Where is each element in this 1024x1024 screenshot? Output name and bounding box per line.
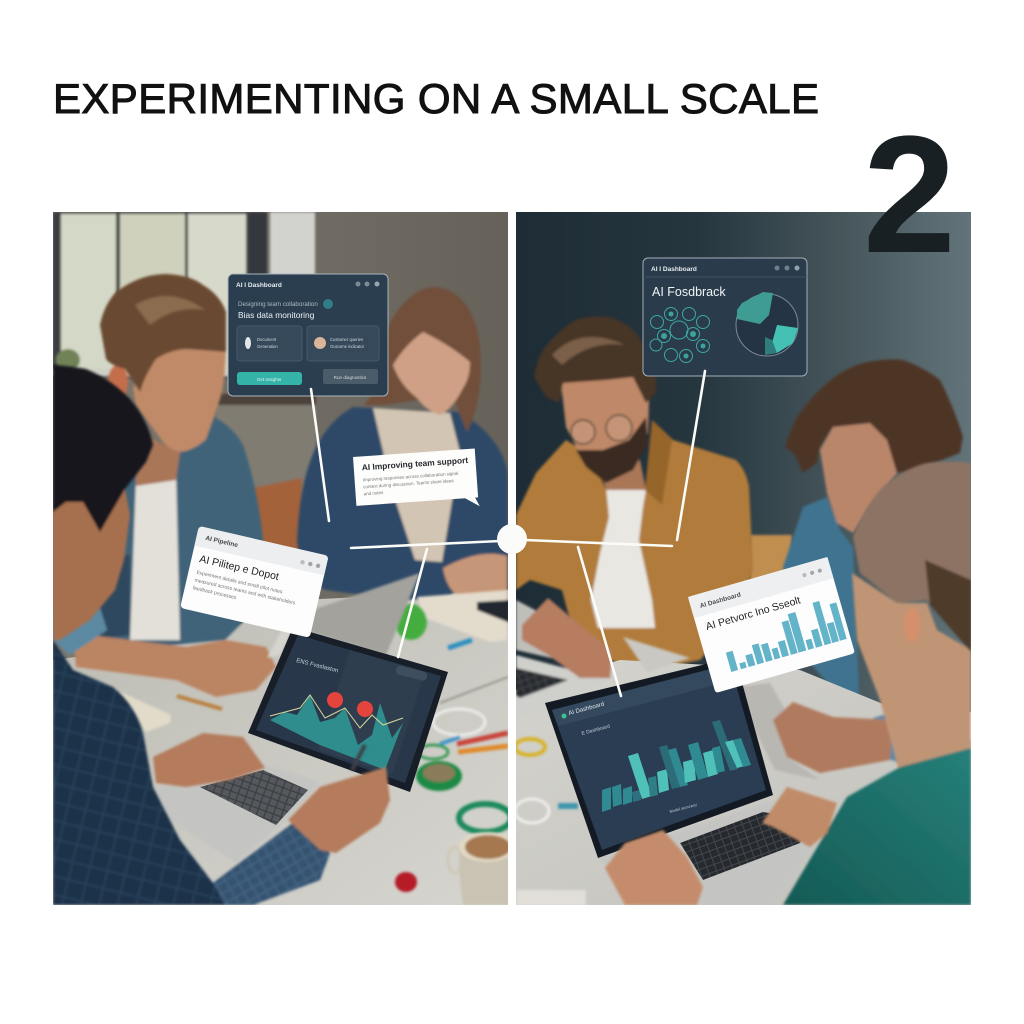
person: man in denim shirt [53,274,276,697]
network diagram [650,308,710,362]
laptop with bar chart: AI Dashboard [568,702,605,717]
laptop back lid [267,573,420,658]
callout: team feedback: and notes [363,490,384,496]
laptop with line chart: ENS Fvaslaston [296,658,339,674]
bar chart [602,720,751,812]
card: AI feedback [643,258,807,376]
small items on table [83,590,511,892]
laptop with bar chart [545,664,801,880]
laptop with line chart [200,632,448,860]
callout: team feedback: AI Improving team support [361,455,469,472]
panel: right photo [515,212,971,906]
card: pilot output [180,526,329,638]
laptop with bar chart: E Dashboard [581,724,611,737]
card: dark dashboard: Customer queries [330,337,363,342]
person: curly haired student [783,359,963,720]
table items [515,739,586,906]
chair [750,535,792,585]
connector lines [311,371,705,696]
person: foreground man in plaid [53,365,390,905]
window [53,212,316,495]
card: pilot output: AI Pipeline [205,535,239,549]
callout: team feedback: Improving responses across collaboration signal [362,471,459,482]
card: AI prediction result [688,557,855,693]
back lid and hand [622,636,898,779]
coffee mug [448,832,515,905]
title: EXPERIMENTING ON A SMALL SCALE [53,75,819,122]
card: dark dashboard: Run diagnostics [334,375,367,380]
laptop with bar chart: Model accuracy [669,802,697,814]
card: pilot output: feedback processes [192,585,237,601]
table [516,660,971,905]
card: pilot output: Experiment details and small pilot notes [196,570,283,595]
panel: left photo [53,212,515,905]
card: dark dashboard: Designing team collaboration [238,301,318,308]
person: foreground woman [605,462,971,905]
callout: team feedback: context during discussion. Teams share ideas [363,478,455,489]
card: pilot output: AI Pilitep e Dopot [198,553,280,583]
card: dark dashboard [228,274,388,396]
wall [53,212,508,660]
card: dark dashboard: Outcome indicator [330,344,365,349]
callout: team feedback [353,448,480,506]
card: AI feedback: AI I Dashboard [651,266,697,273]
person: man in mustard jacket [516,316,753,672]
card: dark dashboard: Document [257,337,277,342]
card: pilot output: measured across teams and with stakeholders [194,577,296,607]
card: dark dashboard: Bias data monitoring [238,310,315,320]
card: AI prediction result: AI Dashboard [699,592,742,610]
chart area [270,695,403,770]
card: dark dashboard: Get Insights [257,377,282,382]
card: dark dashboard: AI I Dashboard [236,282,282,289]
chair [253,478,302,550]
person: woman with laptop [297,287,508,603]
centre node [497,524,527,554]
card: AI prediction result: AI Petvorc Ino Sseolt [704,594,802,633]
wall [516,212,971,712]
big number: 2 [863,102,956,288]
card: dark dashboard: Generation [257,344,278,349]
table [53,590,508,905]
card: AI feedback: AI Fosdbrack [652,285,726,299]
left laptop [516,596,613,700]
pie chart [736,292,798,356]
